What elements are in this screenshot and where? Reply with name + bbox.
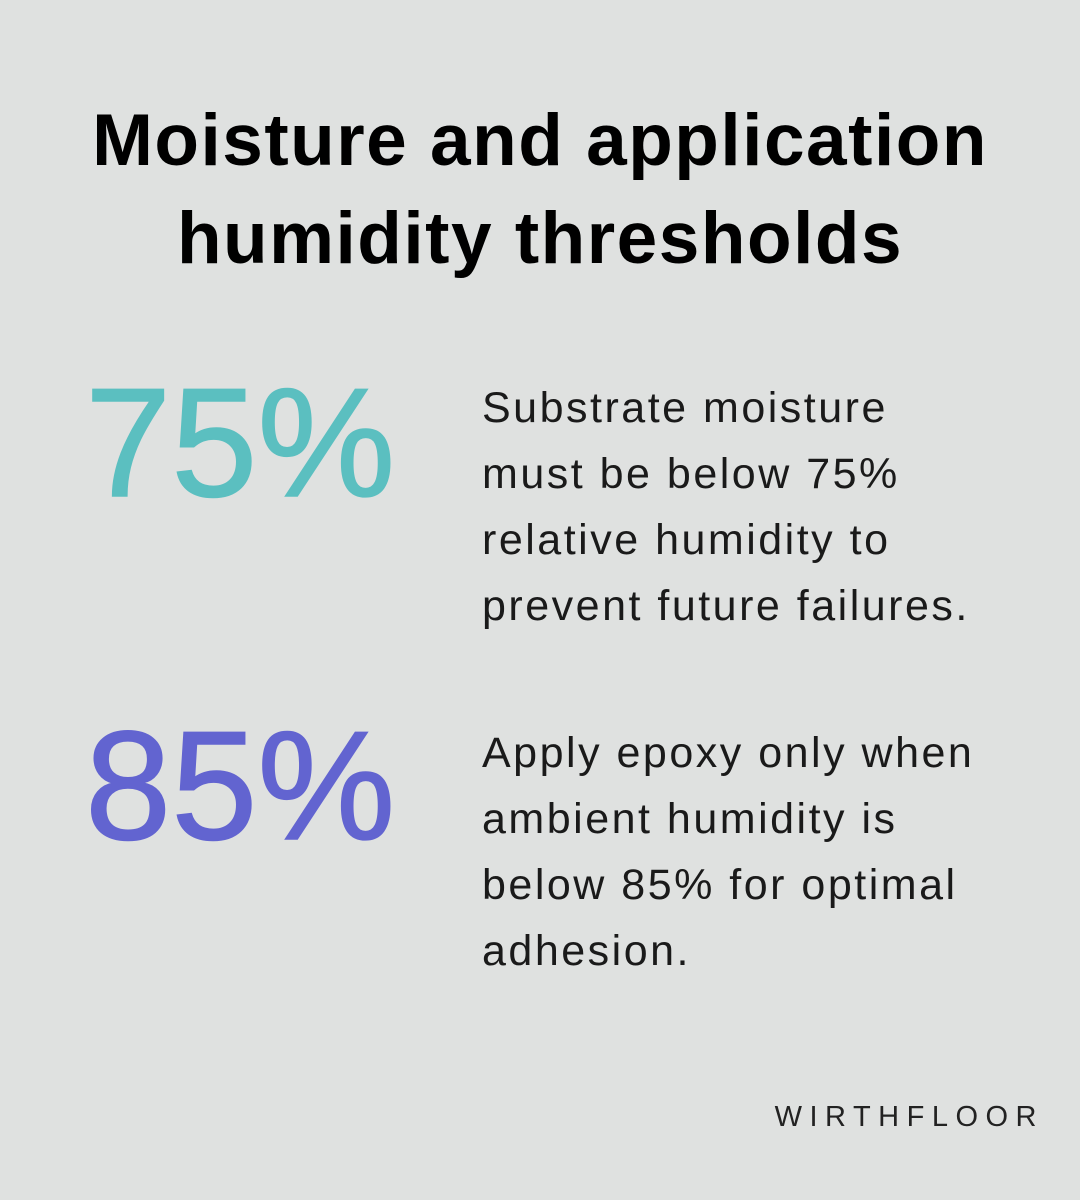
text: substrate moisture — [482, 384, 970, 630]
text: substrate moisture: Substrate moisture — [482, 384, 888, 432]
text: substrate moisture: relative humidity to — [482, 516, 890, 564]
title: humidity thresholds — [177, 198, 903, 279]
text: ambient humidity — [482, 729, 974, 975]
text: ambient humidity: Apply epoxy only when — [482, 729, 974, 777]
text: substrate moisture: prevent future failures. — [482, 582, 970, 630]
text: substrate moisture: must be below 75% — [482, 450, 900, 498]
text: ambient humidity: ambient humidity is — [482, 795, 898, 843]
stat: 85%: 85% — [85, 699, 395, 872]
text: ambient humidity: below 85% for optimal — [482, 861, 958, 909]
stat: 75%: 75% — [85, 356, 395, 529]
title — [92, 100, 988, 279]
title: Moisture and application — [92, 100, 988, 181]
logo: WIRTHFLOOR — [775, 1101, 1044, 1133]
text: ambient humidity: adhesion. — [482, 927, 691, 975]
